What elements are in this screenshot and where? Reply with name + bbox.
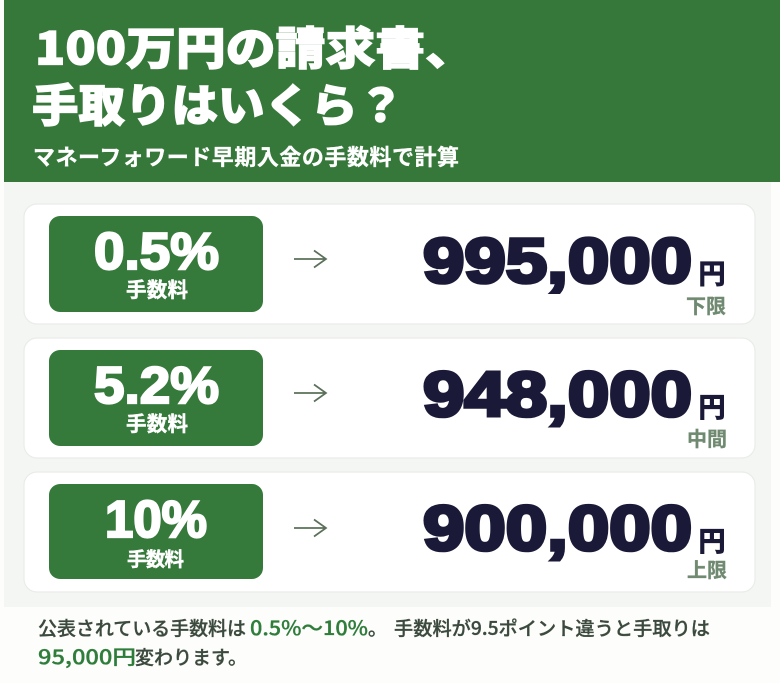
footer note: 95,000円 xyxy=(38,641,136,670)
footer note: 手数料が9.5ポイント違うと手取りは xyxy=(394,614,710,641)
badge: 10% fee: 手数料 xyxy=(127,543,184,572)
subtitle: マネーフォワード早期入金の手数料で計算 xyxy=(33,140,459,172)
footer note: 公表されている手数料は xyxy=(38,614,246,641)
title: 手取りはいくら？ xyxy=(32,70,404,134)
amount: 995,000: 円 xyxy=(698,252,726,292)
badge: 0.5% fee: 0.5% xyxy=(94,223,219,281)
badge: 10% fee xyxy=(49,484,263,579)
badge: 5.2% fee: 5.2% xyxy=(94,357,219,415)
footer note xyxy=(38,612,710,670)
badge: 0.5% fee xyxy=(49,216,263,312)
amount: 948,000: 948,000 xyxy=(423,360,692,430)
footer note: 変わります。 xyxy=(135,643,247,670)
amount: 948,000: 円 xyxy=(698,386,726,425)
title: 100万円の請求書、 xyxy=(35,12,475,78)
footer note: 0.5%～10% xyxy=(250,612,368,641)
header band xyxy=(4,0,780,182)
amount: 900,000: 900,000 xyxy=(423,494,692,564)
badge: 10% fee: 10% xyxy=(105,491,207,549)
badge: 5.2% fee xyxy=(49,350,263,446)
label: middle: 中間 xyxy=(687,423,727,452)
arrow xyxy=(294,520,326,536)
label: lower limit: 下限 xyxy=(686,290,726,319)
label: upper limit: 上限 xyxy=(687,554,727,583)
amount: 900,000: 円 xyxy=(698,520,726,559)
badge: 0.5% fee: 手数料 xyxy=(126,273,188,303)
arrow xyxy=(294,384,326,402)
card: 0.5% xyxy=(24,204,755,324)
arrow xyxy=(294,250,326,268)
footer note: 。 xyxy=(368,614,387,641)
title xyxy=(32,12,475,134)
card: 10% xyxy=(24,472,755,592)
card: 5.2% xyxy=(24,338,755,458)
amount: 995,000: 995,000 xyxy=(423,226,692,296)
badge: 5.2% fee: 手数料 xyxy=(126,407,188,437)
panel: fee comparison xyxy=(4,182,771,607)
